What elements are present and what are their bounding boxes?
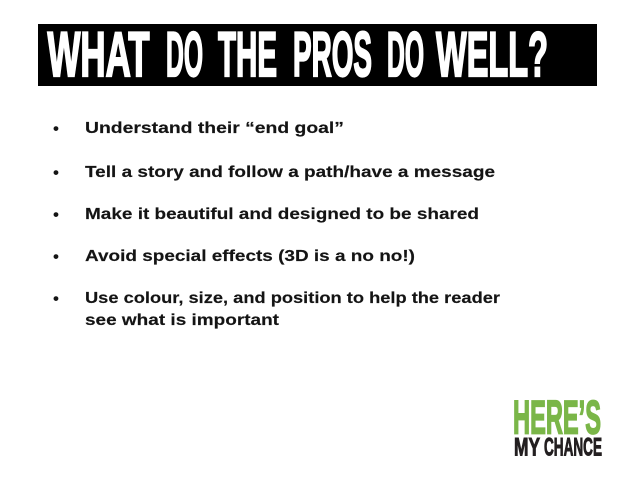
bullet 4: •: [53, 247, 59, 266]
title: WHAT: [48, 20, 150, 90]
bullet 4: [53, 247, 415, 266]
title banner: [38, 20, 597, 90]
bullet 4: Avoid special effects (3D is a no no!): [85, 248, 415, 265]
bullet 1: [53, 119, 344, 138]
bullet 2: •: [53, 163, 59, 182]
bullet 1: Understand their “end goal”: [85, 120, 344, 137]
title: PROS: [293, 20, 372, 90]
title: DO: [166, 20, 203, 90]
title: THE: [218, 20, 277, 90]
bullet 1: •: [53, 119, 59, 138]
logo: Here's My Chance: MY: [514, 434, 540, 462]
title: [48, 20, 548, 90]
bullet 5: [53, 289, 500, 329]
bullet 5: •: [53, 289, 59, 308]
bullet 3: Make it beautiful and designed to be shared: [85, 206, 479, 223]
title: DO: [387, 20, 424, 90]
bullet 2: Tell a story and follow a path/have a message: [85, 164, 495, 181]
bullet 3: •: [53, 205, 59, 224]
bullet list: [53, 119, 500, 329]
bullet 5: see what is important: [85, 312, 279, 329]
logo: Here's My Chance: [513, 390, 602, 462]
bullet 3: [53, 205, 479, 224]
bullet 2: [53, 163, 495, 182]
bullet 5: Use colour, size, and position to help the reader: [85, 290, 500, 307]
